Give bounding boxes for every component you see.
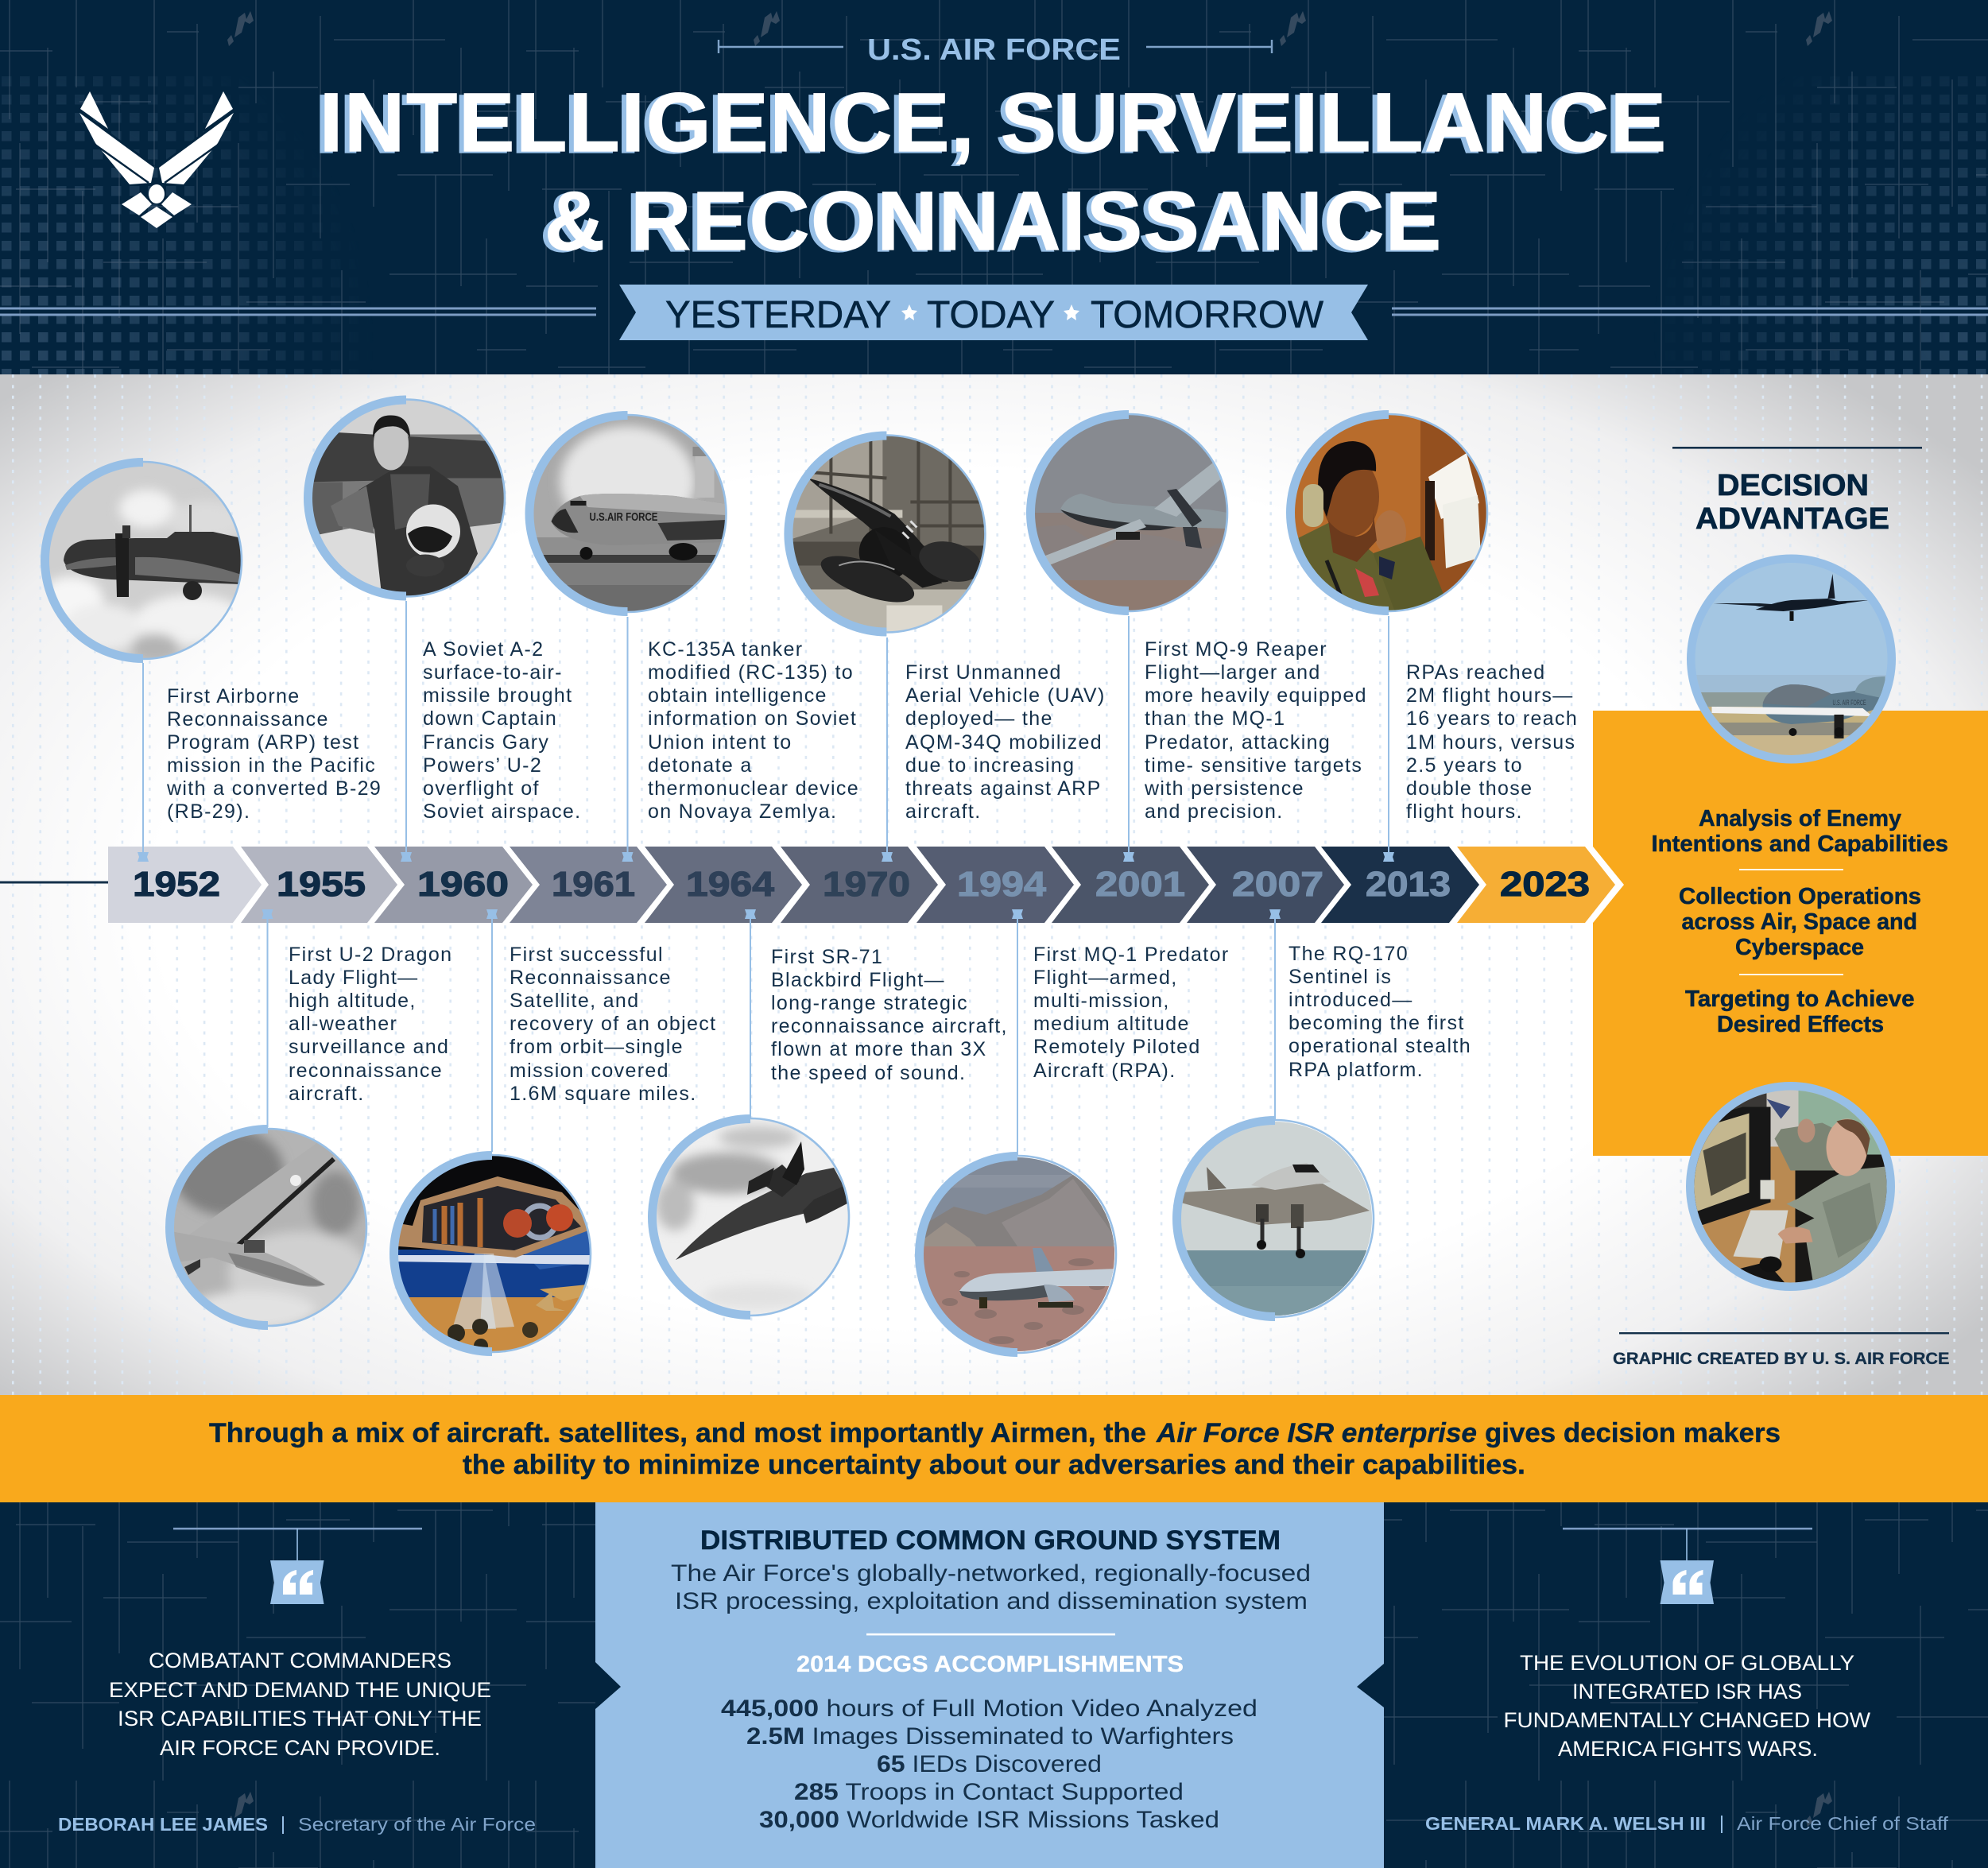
description: Program (ARP) test — [167, 731, 359, 754]
quote text: AIR FORCE CAN PROVIDE. — [160, 1736, 440, 1760]
connector — [262, 909, 273, 1127]
panel: decision advantage orange block — [1593, 711, 1988, 1156]
double rule left — [0, 307, 1988, 316]
eyebrow: U.S. Air Force: U.S. AIR FORCE — [867, 33, 1121, 67]
quote text — [1504, 1651, 1871, 1761]
event: 1994 MQ-1 Predator — [914, 909, 1230, 1362]
photo: AQM-34Q drone in hangar — [783, 431, 990, 638]
attribution: GENERAL MARK A. WELSH III — [1425, 1813, 1706, 1834]
event: 1964 SR-71 — [647, 909, 1008, 1320]
quote text: INTEGRATED ISR HAS — [1572, 1680, 1802, 1703]
description: thermonuclear device — [648, 777, 859, 800]
description: reconnaissance — [289, 1060, 443, 1082]
event: 1961 KC-135A — [525, 410, 859, 862]
callout: orange statement band: Air Force ISR enterprise — [1156, 1418, 1477, 1448]
description: information on Soviet — [648, 707, 857, 730]
description: with a converted B-29 — [166, 777, 382, 800]
description: RPA platform. — [1289, 1059, 1424, 1081]
description: aircraft. — [289, 1083, 364, 1105]
description: flown at more than 3X — [771, 1038, 987, 1060]
panel: distributed common ground system — [595, 1502, 1384, 1868]
description: overflight of — [423, 777, 540, 800]
description: obtain intelligence — [648, 684, 827, 707]
accomplishments list: 30,000 Worldwide ISR Missions Tasked — [759, 1807, 1219, 1833]
heading — [1695, 469, 1889, 536]
description: First Airborne — [167, 685, 300, 707]
title: INTELLIGENCE, SURVEILLANCE — [320, 76, 1666, 169]
description: Powers’ U-2 — [423, 754, 542, 777]
connector — [1012, 909, 1023, 1155]
callout: orange statement band: the ability to minimize uncertainty about our adversaries and their capabilities. — [463, 1450, 1525, 1480]
description: Sentinel is — [1289, 966, 1392, 988]
description: Aircraft (RPA). — [1033, 1060, 1176, 1082]
photo: U-2 Dragon Lady — [165, 1124, 371, 1331]
description: detonate a — [648, 754, 753, 777]
header background — [0, 0, 1988, 374]
accomplishments list: 285 Troops in Contact Supported — [794, 1779, 1184, 1805]
attribution: DEBORAH LEE JAMES — [58, 1814, 268, 1835]
description: 2.5 years to — [1406, 754, 1523, 777]
panel: right quote — [1425, 1528, 1949, 1834]
quote text — [109, 1649, 491, 1760]
description: 1.6M square miles. — [510, 1083, 696, 1105]
accomplishments list: 2.5M Images Disseminated to Warfighters — [746, 1723, 1234, 1750]
description: aircraft. — [905, 800, 981, 823]
attribution — [58, 1814, 536, 1835]
connector — [745, 909, 756, 1118]
description: 16 years to reach — [1406, 707, 1578, 730]
event: 1970 first UAV — [783, 431, 1106, 862]
event: 1955 U-2 — [165, 909, 452, 1331]
photo: pilot Francis Gary Powers — [303, 394, 510, 601]
credit: GRAPHIC CREATED BY U. S. AIR FORCE — [1613, 1350, 1949, 1368]
banner: yesterday today tomorrow — [619, 285, 1368, 340]
description: mission covered — [510, 1060, 669, 1082]
description: First Unmanned — [905, 661, 1062, 684]
description: Lady Flight— — [289, 967, 418, 989]
description: Remotely Piloted — [1033, 1036, 1201, 1058]
description: recovery of an object — [510, 1013, 716, 1035]
timeline chevrons — [0, 847, 1624, 923]
accomplishments list: 445,000 hours of Full Motion Video Analyzed — [721, 1696, 1258, 1722]
quote text: FUNDAMENTALLY CHANGED HOW — [1504, 1708, 1871, 1732]
connector — [622, 617, 633, 862]
description: with persistence — [1144, 777, 1304, 800]
item list: across Air, Space and — [1682, 909, 1917, 935]
year labels: 1955 — [277, 865, 366, 904]
description: down Captain — [423, 707, 557, 730]
description: all-weather — [289, 1013, 397, 1035]
icon: Air Force wings logo — [79, 91, 234, 228]
connector — [882, 638, 893, 862]
photo: RQ-170 Sentinel — [1172, 1115, 1378, 1326]
description: than the MQ-1 — [1145, 707, 1285, 730]
photo: U-2 and Global Hawk — [1687, 555, 1896, 767]
description: First SR-71 — [771, 946, 883, 968]
year labels: 2023 — [1500, 865, 1590, 904]
description: Reconnaissance — [510, 967, 672, 989]
description: First MQ-1 Predator — [1033, 944, 1230, 966]
banner: yesterday today tomorrow: TOMORROW — [1091, 294, 1324, 336]
subheading: 2014 DCGS ACCOMPLISHMENTS — [796, 1652, 1184, 1677]
description: reconnaissance aircraft, — [771, 1015, 1008, 1037]
attribution: Air Force Chief of Staff — [1737, 1813, 1949, 1834]
description: First successful — [510, 944, 664, 966]
description: (RB-29). — [167, 800, 250, 823]
description: First U-2 Dragon — [289, 944, 452, 966]
event: 1960 reconnaissance satellite — [389, 909, 716, 1361]
description: becoming the first — [1289, 1012, 1465, 1034]
description: KC-135A tanker — [648, 638, 803, 661]
description: A Soviet A-2 — [423, 638, 544, 661]
description: Satellite, and — [510, 990, 639, 1012]
photo: RB-29 in clouds — [40, 457, 246, 664]
year labels: 1970 — [823, 865, 910, 904]
description: RPAs reached — [1406, 661, 1546, 684]
description: multi-mission, — [1033, 990, 1170, 1012]
attribution — [1425, 1813, 1949, 1834]
item list: Cyberspace — [1735, 935, 1864, 960]
year labels: 2001 — [1095, 865, 1185, 904]
description: Blackbird Flight— — [771, 969, 945, 991]
description: First MQ-9 Reaper — [1145, 638, 1327, 661]
quote text: THE EVOLUTION OF GLOBALLY — [1520, 1651, 1854, 1675]
heading: ADVANTAGE — [1695, 502, 1889, 536]
heading: DISTRIBUTED COMMON GROUND SYSTEM — [700, 1525, 1281, 1556]
year labels: 1964 — [686, 865, 775, 904]
description: AQM-34Q mobilized — [905, 731, 1103, 754]
photo: MQ-9 Reaper in flight — [1025, 409, 1232, 620]
item list: Analysis of Enemy — [1699, 806, 1901, 831]
photo: analysts at workstations — [1686, 1082, 1898, 1297]
callout: orange statement band: gives decision makers — [1485, 1418, 1781, 1448]
description: 1M hours, versus — [1406, 731, 1575, 754]
quote text: AMERICA FIGHTS WARS. — [1558, 1737, 1818, 1761]
connector — [1383, 616, 1394, 862]
description: Predator, attacking — [1145, 731, 1331, 754]
photo: U-2 and Global Hawk: U.S. AIR FORCE — [1833, 699, 1866, 707]
description: on Novaya Zemlya. — [648, 800, 837, 823]
year labels: 1961 — [552, 865, 635, 904]
panel: timeline background — [0, 374, 1988, 1395]
year labels — [133, 865, 1590, 904]
photo: MQ-1 Predator over desert — [914, 1151, 1121, 1362]
description: The RQ-170 — [1289, 943, 1409, 965]
description: 2M flight hours— — [1406, 684, 1574, 707]
description: missile brought — [423, 684, 572, 707]
year labels: 1960 — [417, 865, 509, 904]
item list — [1652, 806, 1948, 1037]
description: Reconnaissance — [167, 708, 329, 731]
event: 1960 Soviet A-2 — [303, 394, 581, 862]
connector — [401, 601, 412, 862]
item list: Desired Effects — [1717, 1012, 1884, 1037]
panel: left quote — [58, 1528, 536, 1835]
description: Soviet airspace. — [423, 800, 581, 823]
description — [671, 1560, 1311, 1614]
banner: yesterday today tomorrow: TODAY — [927, 294, 1055, 336]
description: time- sensitive targets — [1145, 754, 1362, 777]
photo: SR-71 Blackbird — [647, 1114, 854, 1320]
description: flight hours. — [1406, 800, 1523, 823]
description: Union intent to — [648, 731, 792, 754]
event: 2013 RPA flight hours — [1285, 409, 1578, 862]
description: surface-to-air- — [423, 661, 563, 684]
description: threats against ARP — [905, 777, 1102, 800]
title — [320, 76, 1666, 268]
description: Flight—armed, — [1033, 967, 1178, 989]
description: operational stealth — [1289, 1035, 1471, 1057]
event: 2001 MQ-9 Reaper — [1025, 409, 1367, 862]
accomplishments list — [721, 1696, 1258, 1833]
heading: DECISION — [1717, 469, 1869, 502]
description: double those — [1406, 777, 1533, 800]
photo: KC-135A tanker — [525, 410, 731, 618]
icon: quote tag — [1563, 1528, 1812, 1604]
event: 1952 airborne reconnaissance — [40, 457, 382, 862]
description: ISR processing, exploitation and dissemination system — [675, 1588, 1308, 1614]
title: & RECONNAISSANCE — [544, 175, 1441, 268]
year labels: 1952 — [133, 865, 220, 904]
attribution: Secretary of the Air Force — [298, 1814, 536, 1835]
panel: decision advantage — [1613, 447, 1949, 1368]
photo: KC-135A tanker: U.S.AIR FORCE — [590, 510, 658, 524]
quote text: EXPECT AND DEMAND THE UNIQUE — [109, 1678, 491, 1702]
description: and precision. — [1145, 800, 1284, 823]
footer background — [0, 1502, 1988, 1868]
photo: satellite illustration — [389, 1150, 595, 1361]
quote text: COMBATANT COMMANDERS — [149, 1649, 451, 1672]
item list: Collection Operations — [1679, 884, 1921, 909]
quote text: ISR CAPABILITIES THAT ONLY THE — [118, 1707, 482, 1730]
callout: orange statement band: Through a mix of aircraft. satellites, and most importantly Airmen, the — [209, 1418, 1146, 1448]
description: deployed— the — [905, 707, 1053, 730]
connector — [1123, 616, 1134, 862]
description: Francis Gary — [423, 731, 549, 754]
description: more heavily equipped — [1145, 684, 1367, 707]
connector — [138, 663, 149, 862]
description: mission in the Pacific — [167, 754, 376, 777]
description: modified (RC-135) to — [648, 661, 854, 684]
item list: Targeting to Achieve — [1685, 986, 1914, 1012]
description: high altitude, — [289, 990, 417, 1012]
description: The Air Force's globally-networked, regionally-focused — [671, 1560, 1311, 1587]
event: 2007 RQ-170 — [1172, 909, 1471, 1326]
description: introduced— — [1289, 989, 1413, 1011]
callout: orange statement band — [0, 1395, 1988, 1502]
description: medium altitude — [1033, 1013, 1190, 1035]
item list: Intentions and Capabilities — [1652, 831, 1948, 857]
year labels: 2013 — [1366, 865, 1451, 904]
description: due to increasing — [905, 754, 1075, 777]
year labels: 2007 — [1232, 865, 1323, 904]
description: from orbit—single — [510, 1036, 684, 1058]
accomplishments list: 65 IEDs Discovered — [877, 1751, 1102, 1777]
year labels: 1994 — [957, 865, 1047, 904]
description: surveillance and — [289, 1036, 449, 1058]
banner: yesterday today tomorrow: YESTERDAY — [665, 294, 891, 336]
eyebrow: U.S. Air Force — [719, 33, 1272, 67]
connector — [486, 909, 498, 1152]
connector — [1269, 909, 1281, 1119]
description: Flight—larger and — [1145, 661, 1321, 684]
description: Aerial Vehicle (UAV) — [905, 684, 1106, 707]
icon: quote tag — [173, 1528, 422, 1604]
description: the speed of sound. — [771, 1062, 966, 1084]
description: long-range strategic — [771, 992, 968, 1014]
photo: airman operator — [1285, 409, 1492, 616]
